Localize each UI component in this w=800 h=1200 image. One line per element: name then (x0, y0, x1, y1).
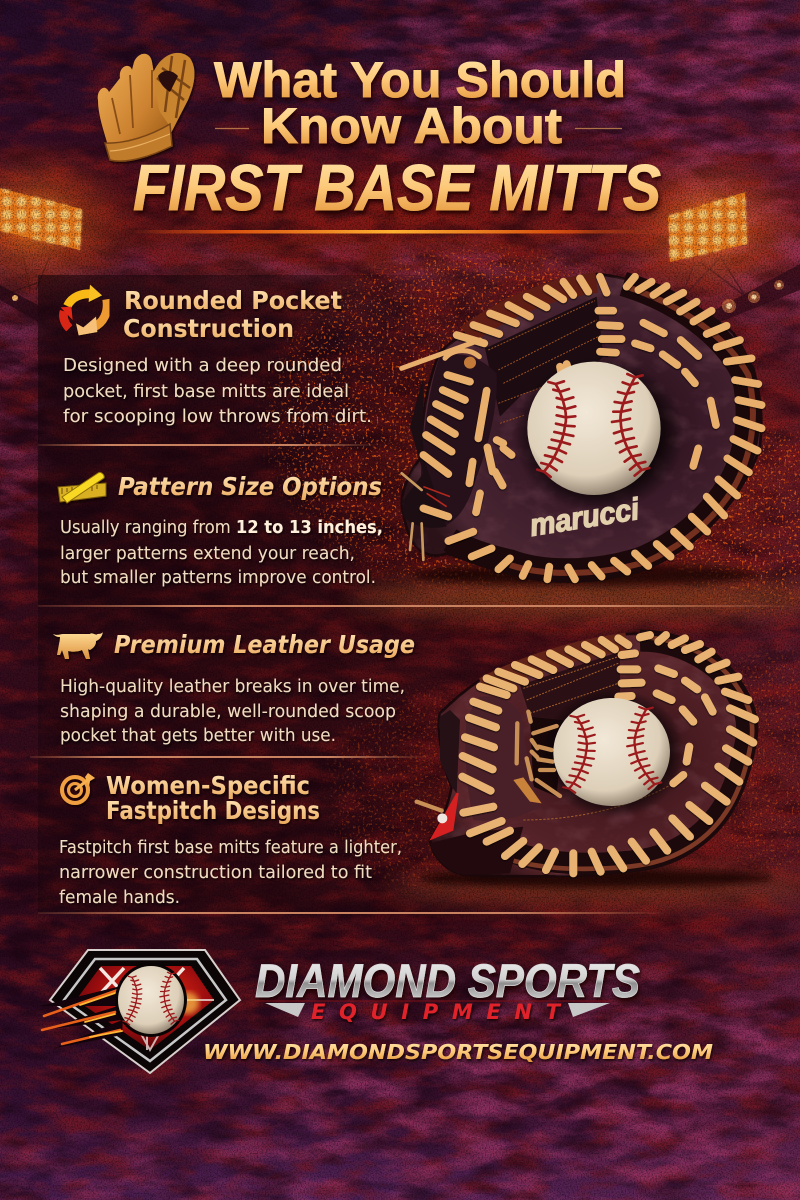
footer logo: diamond badge (40, 950, 240, 1073)
heading (123, 286, 342, 343)
icon: bull (53, 632, 103, 659)
marucci logo: marucci (527, 492, 643, 543)
body text: but smaller patterns improve control. (60, 568, 376, 588)
section: pattern size options (58, 472, 383, 588)
body text: pocket, first base mitts are ideal (63, 382, 349, 402)
title glowing rule (125, 230, 660, 234)
title (125, 52, 661, 234)
body text (59, 838, 402, 908)
section: rounded pocket construction (61, 285, 372, 427)
body text: Usually ranging from 12 to 13 inches, (60, 518, 383, 538)
title line 3: FIRST BASE MITTS (133, 151, 661, 224)
logo baseball (115, 963, 187, 1037)
heading: Pattern Size Options (118, 472, 382, 501)
heading: Rounded Pocket (124, 286, 342, 315)
title line 1: What You Should (214, 52, 626, 108)
stadium floodlight: right (598, 141, 800, 322)
body text: shaping a durable, well-rounded scoop (60, 702, 396, 722)
icon: target with arrow (62, 773, 95, 803)
section: women-specific fastpitch designs (59, 771, 402, 908)
footer wordmark (203, 954, 713, 1064)
website: WWW.DIAMONDSPORTSEQUIPMENT.COM (203, 1040, 713, 1064)
photo: fastpitch first base mitt with baseball (410, 620, 780, 890)
body text: Fastpitch first base mitts feature a lighter, (59, 838, 402, 858)
body text: for scooping low throws from dirt. (63, 407, 372, 427)
panel: dark content backing (38, 275, 518, 913)
body text (63, 356, 372, 427)
heading: Fastpitch Designs (106, 796, 320, 825)
icon: ruler and pencil (58, 472, 106, 503)
heading (106, 771, 320, 825)
body text (60, 677, 405, 746)
photo: marucci first base mitt with baseball (399, 272, 766, 590)
comet streaks (40, 985, 125, 1048)
heading: Women-Specific (106, 771, 310, 800)
stadium floodlight: left (0, 137, 145, 322)
icon: golden baseball glove (98, 53, 194, 161)
body text: High-quality leather breaks in over time, (60, 677, 405, 697)
body text: pocket that gets better with use. (60, 726, 336, 746)
body text: narrower construction tailored to fit (59, 863, 372, 883)
body text (60, 518, 383, 588)
title line 2 with flanking rules: Know About (261, 98, 562, 154)
section: premium leather usage (53, 630, 415, 746)
body text: female hands. (59, 888, 180, 908)
heading: Construction (123, 314, 294, 343)
body text: Designed with a deep rounded (63, 356, 342, 376)
baseball (527, 362, 661, 495)
red tag (429, 793, 459, 841)
equipment: EQUIPMENT (311, 1000, 562, 1024)
diamond sports: DIAMOND SPORTS (255, 954, 640, 1007)
icon: circular arrows (61, 285, 107, 335)
heading: Premium Leather Usage (114, 630, 415, 659)
body text: larger patterns extend your reach, (60, 544, 355, 564)
baseball (551, 696, 672, 808)
